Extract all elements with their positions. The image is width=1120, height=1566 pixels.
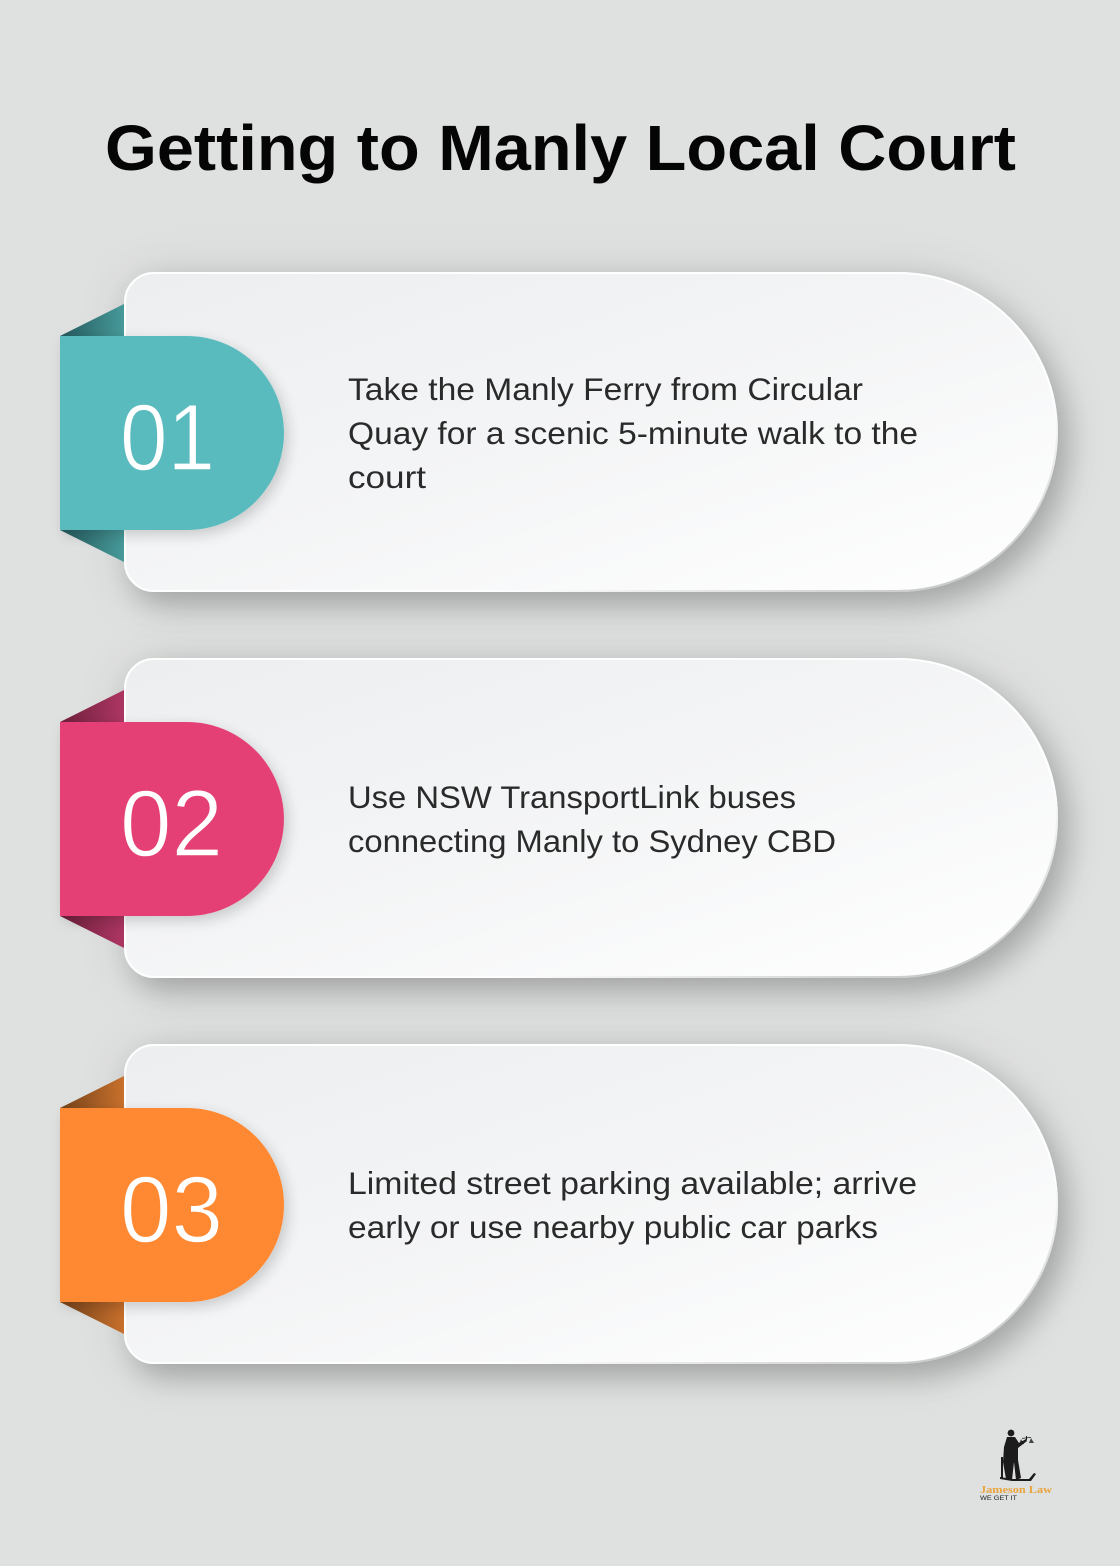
- icon: lady justice: [1000, 1430, 1036, 1481]
- card background 01: [125, 273, 1057, 591]
- ribbon folds 02: [60, 690, 124, 948]
- number 01: 01: [120, 385, 215, 491]
- panel: step 03: [60, 1045, 1057, 1363]
- number badge 02: [60, 722, 284, 916]
- panel: step 01: [60, 273, 1057, 591]
- ribbon folds 03: [60, 1076, 124, 1334]
- description 01: Take the Manly Ferry from Circular: [348, 371, 863, 407]
- logo: Jameson Law: [980, 1430, 1052, 1502]
- description 03: Limited street parking available; arrive: [348, 1165, 917, 1201]
- description 01: Quay for a scenic 5-minute walk to the: [348, 415, 918, 451]
- ribbon folds 01: [60, 304, 124, 562]
- title: Getting to Manly Local Court: [105, 112, 1016, 184]
- number 02: 02: [120, 771, 223, 877]
- card background 03: [125, 1045, 1057, 1363]
- number 03: 03: [120, 1157, 223, 1263]
- logo tagline: WE GET IT: [980, 1495, 1017, 1502]
- description 01: [348, 371, 918, 495]
- number badge 03: [60, 1108, 284, 1302]
- number badge 01: [60, 336, 284, 530]
- description 02: connecting Manly to Sydney CBD: [348, 823, 836, 859]
- description 01: court: [348, 459, 426, 495]
- description 03: [348, 1165, 917, 1245]
- description 03: early or use nearby public car parks: [348, 1209, 878, 1245]
- card background 02: [125, 659, 1057, 977]
- description 02: [348, 779, 836, 859]
- panel: step 02: [60, 659, 1057, 977]
- logo name: Jameson Law: [980, 1485, 1052, 1496]
- description 02: Use NSW TransportLink buses: [348, 779, 796, 815]
